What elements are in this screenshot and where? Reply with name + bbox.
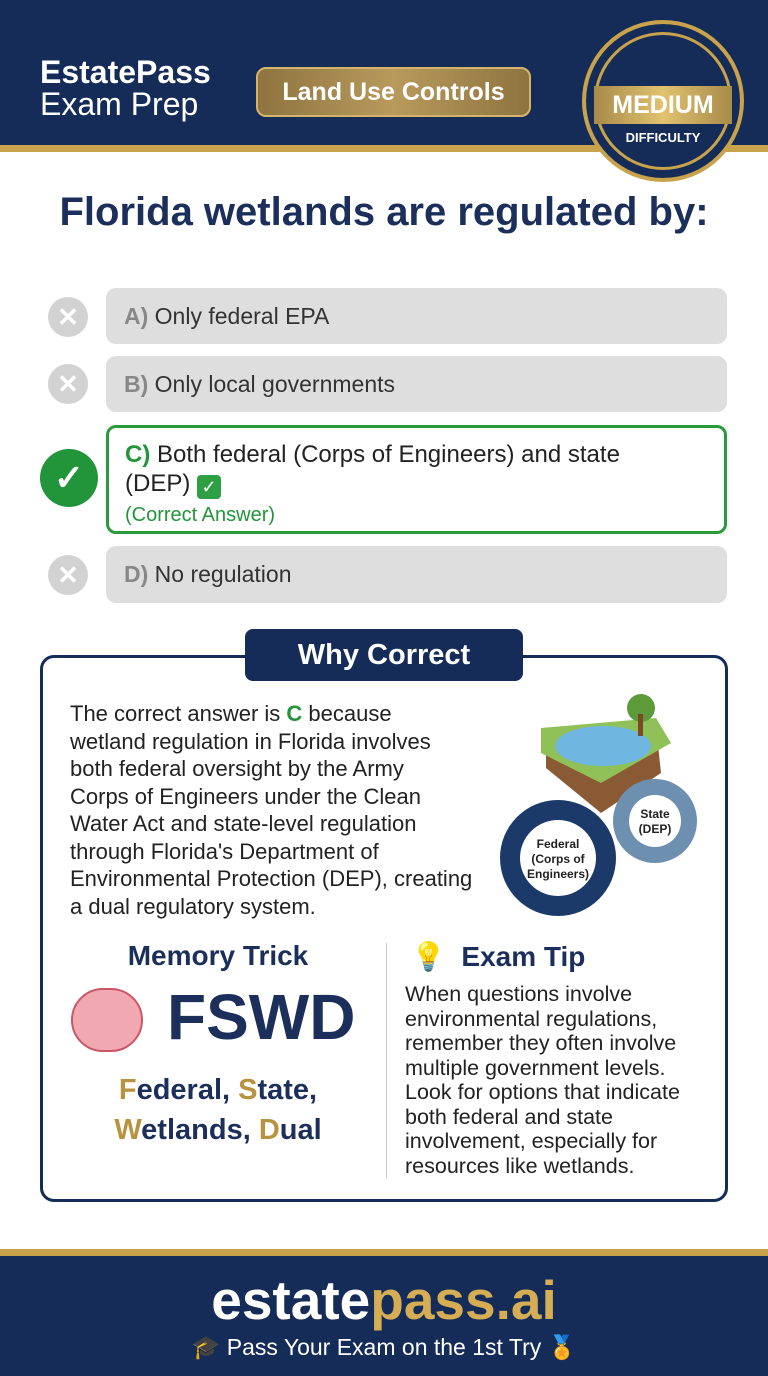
body text: both federal oversight by the Army <box>70 756 404 781</box>
memory trick heading: Memory Trick <box>128 940 308 971</box>
body text: through Florida's Department of <box>70 838 379 864</box>
exam tip text: involvement, especially for <box>405 1129 657 1153</box>
category pill <box>256 67 531 117</box>
body text: Corps of Engineers under the Clean <box>70 784 421 808</box>
exam tip text: resources like wetlands. <box>405 1154 634 1178</box>
option A <box>48 288 727 344</box>
text: (Correct Answer) <box>125 504 275 526</box>
illustration: wetland and gears: (Corps of <box>531 852 586 866</box>
footer <box>0 1249 768 1376</box>
difficulty badge <box>582 20 744 182</box>
text: Only federal EPA <box>155 302 329 328</box>
option C correct <box>40 425 727 534</box>
text: A) <box>124 302 148 328</box>
text: No regulation <box>155 561 291 587</box>
body text: Environmental Protection (DEP), creating <box>70 866 472 891</box>
logo text <box>40 54 211 122</box>
text: B) <box>124 370 148 396</box>
exam tip text: environmental regulations, <box>405 1006 657 1030</box>
difficulty badge: DIFFICULTY <box>626 130 700 145</box>
icon: brain <box>71 988 143 1052</box>
expansion <box>114 1074 322 1146</box>
illustration: wetland and gears: State <box>640 807 670 821</box>
expansion: Wetlands, Dual <box>114 1114 322 1146</box>
text: ✕ <box>57 560 79 590</box>
option B <box>48 356 727 412</box>
body text: a dual regulatory system. <box>70 894 316 918</box>
body text: The correct answer is C because <box>70 701 392 726</box>
category pill: Land Use Controls <box>282 78 505 106</box>
why correct tab: Why Correct <box>298 639 470 671</box>
logo text: Exam Prep <box>40 86 198 122</box>
exam tip text: Look for options that indicate <box>405 1080 680 1104</box>
exam tip text: multiple government levels. <box>405 1056 666 1080</box>
footer logo: estatepass.ai <box>211 1269 557 1331</box>
text: D) <box>124 561 148 587</box>
header <box>0 0 768 152</box>
FSWD: FSWD <box>167 981 355 1053</box>
illustration: wetland and gears: Federal <box>537 837 579 851</box>
body text <box>70 701 472 918</box>
question title: Florida wetlands are regulated by: <box>59 190 709 234</box>
exam tip text: both federal and state <box>405 1104 613 1128</box>
option D <box>48 546 727 603</box>
body text: wetland regulation in Florida involves <box>70 728 431 754</box>
exam tip text: remember they often involve <box>405 1031 676 1055</box>
difficulty badge: MEDIUM <box>612 91 714 119</box>
exam tip text <box>405 982 680 1178</box>
illustration: wetland and gears: Engineers) <box>527 867 589 881</box>
text: ✕ <box>57 302 79 332</box>
logo text: EstatePass <box>40 54 211 90</box>
tagline: 🎓 Pass Your Exam on the 1st Try 🏅 <box>192 1334 576 1360</box>
text: ✕ <box>57 369 79 399</box>
expansion: Federal, State, <box>119 1074 317 1106</box>
illustration: wetland and gears <box>500 694 697 916</box>
exam tip heading: 💡 Exam Tip <box>411 941 585 972</box>
why correct tab <box>245 629 523 681</box>
text: ✓ <box>54 457 84 498</box>
body text: Water Act and state-level regulation <box>70 811 416 836</box>
exam tip text: When questions involve <box>405 982 632 1006</box>
illustration: wetland and gears: (DEP) <box>639 822 671 836</box>
text: C) Both federal (Corps of Engineers) and state (DEP) <box>125 441 620 497</box>
text: Only local governments <box>155 370 395 396</box>
panel: why correct <box>40 655 728 1202</box>
text: ✓ <box>201 477 217 497</box>
